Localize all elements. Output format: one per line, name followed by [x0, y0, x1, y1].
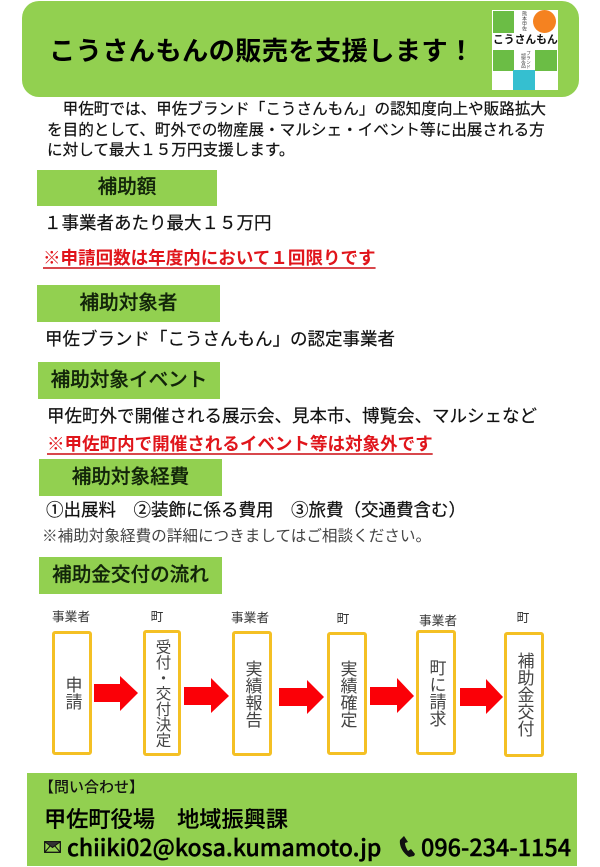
heading: eligible events — [38, 362, 220, 399]
actor label 5: 事業者 — [419, 614, 457, 628]
logo green square top — [493, 11, 514, 33]
eligible events text: 甲佐町外で開催される展示会、見本市、博覧会、マルシェなど — [47, 406, 537, 426]
heading: eligible expenses: 補助対象経費 — [72, 466, 189, 488]
contact panel — [27, 773, 577, 866]
intro text — [47, 100, 546, 159]
logo orange circle — [533, 10, 556, 33]
eligible expenses note: ※補助対象経費の詳細につきましてはご相談ください。 — [42, 528, 431, 545]
actor label 3: 事業者 — [231, 611, 269, 625]
heading: eligible persons: 補助対象者 — [80, 292, 177, 314]
logo brand text: ブランド — [526, 51, 532, 69]
step 1 box — [52, 631, 92, 755]
step 1 box: 申請 — [63, 676, 82, 710]
step 2 box — [143, 630, 181, 756]
heading: subsidy amount: 補助額 — [98, 176, 156, 198]
intro text: に対して最大１５万円支援します。 — [47, 142, 294, 159]
arrow 4 — [370, 678, 414, 713]
title: こうさんもんの販売を支援します！ — [49, 36, 475, 66]
department name: 甲佐町役場 地域振興課 — [44, 807, 288, 832]
envelope icon — [44, 841, 61, 853]
logo green square left — [493, 50, 514, 71]
actor label 2: 町 — [151, 610, 163, 624]
actor label 1: 事業者 — [52, 610, 90, 624]
subsidy limit note: ※申請回数は年度内において１回限りです — [43, 248, 376, 268]
eligible persons text: 甲佐ブランド「こうさんもん」の認定事業者 — [45, 329, 395, 349]
email: chiiki02@kosa.kumamoto.jp — [67, 829, 381, 863]
step 4 box — [327, 632, 367, 755]
step 2 box: 受付・交付決定 — [154, 639, 171, 747]
heading: subsidy amount — [37, 170, 217, 206]
logo — [492, 10, 558, 90]
contact heading: 【問い合わせ】 — [39, 779, 144, 796]
step 6 box: 補助金交付 — [515, 652, 534, 737]
logo green square right — [535, 50, 557, 71]
arrow 3 — [279, 680, 324, 714]
actor label 4: 町 — [337, 612, 349, 626]
step 3 box — [232, 631, 272, 756]
step 6 box — [504, 632, 544, 757]
logo teal square — [513, 70, 535, 90]
eligible events note: ※甲佐町内で開催されるイベント等は対象外です — [47, 434, 433, 454]
eligible expenses text: ①出展料 ②装飾に係る費用 ③旅費（交通費含む） — [46, 500, 466, 520]
logo certified text: 認定品 — [520, 53, 526, 68]
logo name: こうさんもん — [493, 34, 558, 46]
actor label 6: 町 — [517, 611, 529, 625]
heading: payment flow: 補助金交付の流れ — [52, 564, 209, 586]
step 5 box: 町に請求 — [427, 658, 446, 726]
step 4 box: 実績確定 — [338, 660, 357, 728]
heading: eligible expenses — [39, 459, 222, 496]
title banner — [22, 1, 579, 97]
intro text: を目的として、町外での物産展・マルシェ・イベント等に出展される方 — [47, 122, 545, 138]
heading: eligible events: 補助対象イベント — [51, 369, 207, 391]
phone icon — [400, 836, 415, 857]
arrow 5 — [460, 679, 503, 714]
flow chart — [52, 610, 544, 757]
heading: payment flow — [39, 557, 222, 594]
phone number: 096-234-1154 — [421, 829, 571, 863]
step 3 box: 実績報告 — [243, 660, 262, 728]
heading: eligible persons — [37, 285, 220, 322]
step 5 box — [416, 630, 456, 755]
arrow 1 — [94, 676, 138, 711]
arrow 2 — [184, 678, 229, 713]
subsidy amount text: １事業者あたり最大１５万円 — [44, 213, 272, 233]
intro text: 甲佐町では、甲佐ブランド「こうさんもん」の認知度向上や販路拡大 — [63, 101, 546, 118]
logo small text: 熊本甲佐 — [521, 11, 527, 31]
